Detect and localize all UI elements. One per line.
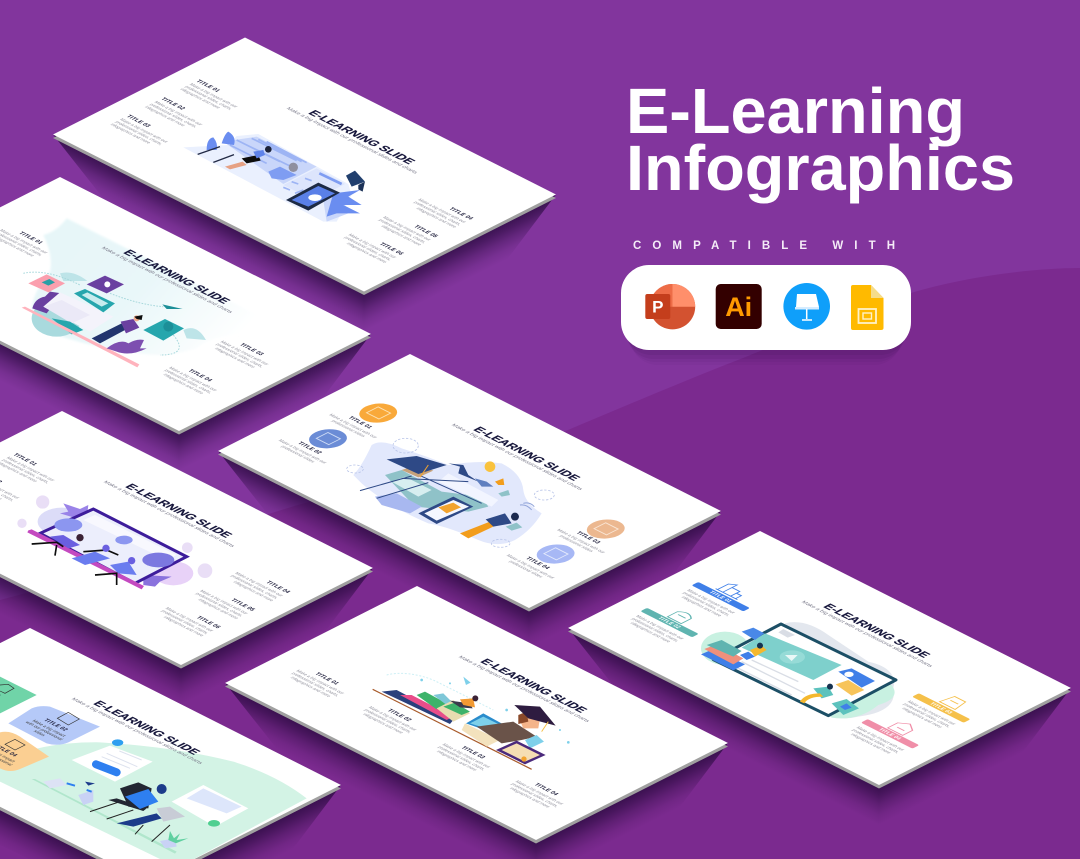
slide 1 left blocks: infographics and more	[109, 123, 153, 145]
slide 5 text blocks: infographics and more	[849, 733, 893, 755]
icon: Illustrator	[716, 284, 762, 329]
slide 6 text	[285, 616, 671, 810]
panel: slide 4, purple students	[0, 411, 373, 668]
slide 1 text	[109, 65, 503, 264]
slide 1 right blocks: professional slides, charts,	[412, 201, 463, 226]
slide 6 text blocks	[285, 666, 572, 810]
slide 6 text blocks: Make a big impact with our	[367, 706, 418, 731]
slide 2 edge	[0, 180, 371, 434]
slide 6 text blocks: professional slides, charts,	[290, 672, 341, 697]
slide 6 text blocks: infographics and more	[509, 787, 552, 809]
panel: slide 7, mint illustration	[0, 628, 341, 859]
slide 4 right blocks: infographics and more	[162, 615, 206, 637]
slide 6 text blocks: Make a big impact with our	[441, 743, 492, 769]
slide 5 text blocks: Make a big impact with our	[855, 726, 906, 752]
slide 1 heading: E-LEARNING SLIDE	[305, 109, 417, 166]
slide 6 illustration: graduate and books	[373, 673, 570, 769]
slide 1 right blocks: TITLE 04	[447, 207, 475, 221]
slide 4 right blocks: Make a big impact with our	[164, 607, 215, 632]
slide 4 subtitle: Make a big impact with our professional slides and charts	[101, 480, 236, 548]
slide 4 right blocks: infographics and more	[197, 598, 240, 620]
slide 3 text blocks: Make a big impact with our	[277, 439, 328, 464]
slide 4 right blocks: professional slides, charts,	[229, 574, 280, 600]
slide 1 left blocks: Make a big impact with our	[188, 83, 239, 108]
slide 4 card	[0, 411, 373, 665]
slide 6 text blocks: infographics and more	[289, 676, 333, 698]
slide 3 text blocks: TITLE 04	[523, 556, 551, 571]
slide 1 right blocks: professional slides, charts,	[377, 218, 428, 244]
icon: PowerPoint: P	[652, 298, 663, 316]
slide 2 card	[0, 177, 371, 431]
slide 1 right blocks: infographics and more	[380, 224, 423, 246]
slide 4 right blocks: TITLE 06	[194, 616, 222, 630]
slide 4 right blocks: Make a big impact with our	[199, 589, 249, 615]
slide 5 text blocks: professional slides, charts,	[902, 703, 952, 728]
slide 7 text blocks: Make a big impact	[31, 719, 67, 737]
slide 5 outline icons	[664, 581, 969, 736]
slide 2 text blocks: Make a big impact with our	[168, 366, 219, 392]
slide 3 text blocks	[273, 410, 614, 582]
slide 5 label bars	[640, 582, 970, 749]
slide 5 text blocks: Make a big impact with our	[906, 700, 957, 726]
slide 5 text blocks: TITLE 01	[707, 591, 733, 604]
slide 1 right blocks: Make a big impact with our	[417, 198, 468, 224]
slide 6 text blocks: Make a big impact with our	[295, 669, 346, 695]
slide 7 text blocks	[0, 681, 76, 769]
slide 5 text blocks: Make a big impact with our	[635, 615, 685, 640]
slide 7 text	[0, 658, 215, 816]
slide 7 text blocks: with our professional	[24, 721, 64, 741]
panel: slide 5, video tablet	[568, 531, 1071, 788]
icon: Google Slides	[851, 285, 884, 330]
slide 2 text blocks: Make a big impact with our	[219, 340, 270, 366]
slide 1 left blocks: Make a big impact with our	[119, 118, 170, 143]
title	[626, 75, 1015, 204]
slide 4 right blocks: TITLE 05	[229, 598, 256, 612]
slide 1 left blocks: TITLE 03	[124, 115, 152, 129]
slide 1 left blocks: Make a big impact with our	[153, 100, 204, 126]
software pill	[621, 265, 911, 365]
slide 1 left blocks: professional slides, charts,	[184, 85, 234, 110]
slide 2 text	[0, 206, 315, 397]
slide 5 text blocks: professional slides, charts,	[630, 617, 680, 642]
slide 7 subtitle: Make a big impact with our professional slides and charts	[69, 697, 204, 765]
slide 5 text blocks: professional slides, charts,	[851, 728, 901, 754]
slide 1 right blocks	[338, 195, 475, 264]
slide 4 right blocks: professional slides, charts,	[160, 609, 210, 635]
slide 3 text blocks: TITLE 03	[574, 531, 602, 545]
panel: slide 2, teal illustration	[0, 177, 371, 434]
slide 7 card	[0, 628, 341, 859]
slide 4 right blocks: Make a big impact with our	[234, 571, 285, 597]
slide 6 card	[225, 586, 728, 840]
slide 2 text blocks: infographics and more	[214, 347, 257, 369]
slide 4 right blocks: professional slides, charts,	[194, 592, 245, 617]
slide 3 subtitle: Make a big impact with our professional slides and charts	[449, 423, 584, 491]
slide 3 icon circles	[301, 400, 634, 568]
slide 4 left blocks: professional slides, charts,	[1, 459, 51, 484]
slide 4 illustration: students at screen	[17, 495, 212, 589]
slide 1 left blocks: TITLE 01	[194, 79, 222, 93]
slide 6 text blocks: TITLE 01	[313, 672, 341, 686]
slide 1 right blocks: infographics and more	[345, 242, 389, 264]
slide 4 right blocks: infographics and more	[232, 580, 275, 602]
slide 1 illustration: online class	[183, 132, 365, 222]
slide 1 left blocks: infographics and more	[144, 105, 187, 127]
title: Infographics	[626, 132, 1015, 204]
panel: slide 3, circles	[218, 354, 721, 612]
slide 5 card	[568, 531, 1071, 785]
slide 3 text blocks: TITLE 02	[295, 441, 323, 455]
slide 3 card	[218, 354, 721, 608]
slide 6 text blocks: TITLE 04	[532, 783, 560, 797]
slide 3 text blocks: TITLE 01	[346, 416, 374, 430]
title: E-Learning	[626, 75, 965, 147]
slide 7 edge	[0, 632, 341, 859]
panel: slide 6, graduate	[225, 586, 728, 844]
slide 2 text blocks: professional slides, charts,	[215, 343, 265, 368]
slide 5 subtitle: Make a big impact with our professional slides and charts	[799, 600, 934, 668]
slide 1 left blocks: professional slides, charts,	[114, 120, 164, 146]
slide 5 text blocks: TITLE 02	[656, 616, 682, 630]
slide 6 text blocks: professional slides, charts,	[437, 745, 487, 771]
icon: PowerPoint	[645, 284, 695, 329]
slide 4 left blocks: TITLE 01	[11, 453, 39, 467]
slide 5 text blocks	[625, 584, 967, 757]
slide 1 right blocks: TITLE 05	[412, 225, 439, 239]
slide 4 right blocks: TITLE 04	[264, 581, 292, 595]
slide 6 text blocks: professional slides, charts,	[510, 782, 560, 808]
slide 1 right blocks: Make a big impact with our	[382, 216, 432, 241]
slide 2 text blocks: TITLE 01	[17, 231, 44, 245]
slide 6 edge	[225, 590, 728, 844]
slide 7 text blocks: TITLE 02	[41, 718, 69, 732]
slide 6 text blocks: Make a big impact with our	[514, 780, 565, 805]
slide 5 text	[622, 559, 1016, 758]
slide 1 right blocks: infographics and more	[415, 207, 458, 229]
slide 5 text blocks: infographics and more	[901, 707, 944, 729]
slide 3 text blocks: professional slides	[508, 560, 545, 579]
slide 2 text blocks: TITLE 04	[186, 369, 214, 383]
slide 6 text blocks: TITLE 02	[385, 709, 413, 723]
slide 5 text blocks: TITLE 03	[928, 702, 953, 715]
slide 7 text blocks: slides	[32, 729, 47, 737]
slide 6 text blocks: TITLE 03	[459, 746, 487, 760]
slide 1 left blocks: infographics and more	[179, 87, 222, 109]
slide 5 text blocks: infographics and more	[680, 595, 724, 617]
slide 2 text blocks	[0, 225, 277, 397]
slide 6 subtitle: Make a big impact with our professional slides and charts	[456, 655, 591, 723]
slide 6 text blocks: infographics and more	[362, 712, 405, 734]
slide 5 text blocks: Make a big impact with our	[686, 589, 737, 614]
slide 6 text blocks: infographics and more	[435, 750, 479, 772]
slide 6 heading: E-LEARNING SLIDE	[477, 658, 589, 714]
slide 2 text blocks: TITLE 03	[237, 343, 265, 357]
slide 1 right blocks: professional slides, charts,	[343, 236, 393, 261]
slide 3 heading: E-LEARNING SLIDE	[470, 426, 582, 482]
slide 2 illustration: reader with book	[22, 218, 287, 367]
slide 5 edge	[568, 534, 1071, 788]
slide 3 text blocks: professional slides	[280, 445, 317, 463]
panel: slide 1, six titles	[53, 38, 556, 295]
slide 5 illustration: video lesson tablet	[701, 622, 896, 718]
slide 3 text	[273, 382, 669, 582]
icon: Illustrator: Ai	[725, 292, 752, 322]
slide 1 left blocks	[109, 79, 246, 148]
slide 4 heading: E-LEARNING SLIDE	[122, 483, 234, 539]
slide 3 edge	[218, 358, 721, 612]
slide 1 left blocks: TITLE 02	[159, 97, 187, 111]
slide 5 heading: E-LEARNING SLIDE	[820, 603, 932, 659]
slide 4 left blocks	[0, 453, 63, 505]
icon: Keynote	[783, 283, 830, 330]
slide 2 text blocks: infographics and more	[162, 373, 205, 395]
slide 6 text blocks: professional slides, charts,	[363, 708, 413, 734]
slide 1 right blocks: TITLE 06	[377, 242, 405, 256]
slide 4 text	[0, 438, 320, 637]
slide 3 text blocks: professional slides	[330, 419, 367, 438]
slide 3 text blocks: Make a big impact with our	[556, 528, 607, 554]
slide 5 text blocks: TITLE 04	[876, 728, 903, 741]
slide 2 subtitle: Make a big impact with our professional slides and charts	[99, 246, 234, 314]
slide 3 illustration: graduation cap and books	[347, 438, 554, 547]
slide 1 right blocks: Make a big impact with our	[347, 233, 398, 259]
slide 4 left blocks: Make a big impact with our	[5, 456, 56, 482]
slide 2 text blocks: professional slides, charts,	[163, 369, 214, 394]
slide 3 text blocks: Make a big impact with our	[505, 554, 556, 579]
slide 4 edge	[0, 414, 373, 668]
slide 1 card	[53, 38, 556, 292]
slide 3 text blocks: Make a big impact with our	[328, 413, 379, 439]
compatible with label: COMPATIBLE WITH	[633, 240, 895, 252]
slide 4 right blocks	[155, 568, 292, 637]
slide 1 subtitle: Make a big impact with our professional slides and charts	[284, 107, 419, 175]
slide 3 text blocks: professional slides	[558, 534, 595, 553]
slide 2 heading: E-LEARNING SLIDE	[120, 249, 232, 305]
slide 7 heading: E-LEARNING SLIDE	[90, 700, 202, 756]
slide 7 illustration: student at laptop	[0, 677, 307, 859]
slide 5 text blocks: professional slides, charts,	[681, 591, 732, 617]
slide 1 left blocks: professional slides, charts,	[148, 103, 199, 128]
slide 5 text blocks: infographics and more	[629, 621, 672, 643]
slide 1 edge	[53, 41, 556, 295]
